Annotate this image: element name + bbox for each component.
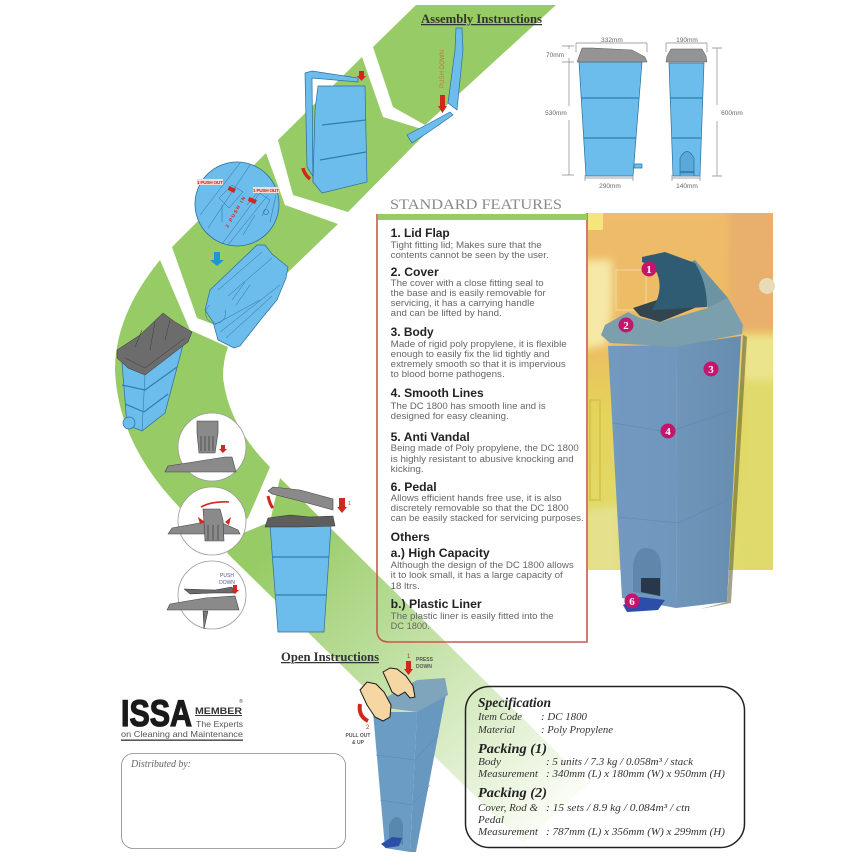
pull out label: 2	[366, 725, 370, 731]
feature: anti vandal: 5. Anti Vandal	[391, 432, 470, 444]
dimension lines and labels: 600mm	[721, 110, 743, 117]
pull out label	[346, 704, 370, 746]
feature: body: Made of rigid poly propylene, it is flexible	[391, 339, 567, 349]
bin cover	[601, 298, 743, 347]
red push labels: 1 PUSH OUT	[197, 180, 223, 186]
feature: high capacity: Although the design of the DC 1800 allows	[391, 560, 574, 570]
red push labels	[197, 179, 279, 229]
feature: smooth lines: 4. Smooth Lines	[391, 388, 484, 400]
logo: ISSA member: on Cleaning and Maintenance	[121, 729, 243, 739]
dimension drawing: side view	[577, 48, 647, 176]
callout 4	[660, 424, 676, 438]
feature: body: extremely smooth so that it is impervious	[391, 359, 566, 369]
press down label: 1	[407, 654, 411, 660]
feature: body: 3. Body	[391, 327, 434, 339]
feature: smooth lines	[391, 388, 546, 421]
feature: body: enough to easily fix the lid tightly and	[391, 349, 550, 359]
packing 2 rows: Measurement	[477, 827, 539, 838]
subheading: others: Others	[391, 532, 430, 544]
icon: red curved arrow	[303, 168, 310, 179]
spec rows: Item Code	[477, 712, 522, 723]
icon: blue down arrow	[210, 252, 224, 266]
callout 6: 6	[629, 596, 635, 608]
spec rows: Material	[477, 725, 515, 736]
feature: smooth lines: designed for easy cleaning.	[391, 411, 509, 421]
label: push down: PUSH DOWN	[440, 50, 446, 88]
panel: standard features	[377, 213, 587, 642]
packing 1 heading: Packing (1)	[478, 742, 547, 757]
logo: ISSA member: ISSA	[121, 693, 192, 734]
label: push down: PUSH	[220, 573, 234, 579]
red push labels: 1 PUSH OUT	[253, 188, 279, 194]
feature: cover: and can be lifted by hand.	[391, 308, 502, 318]
feature: plastic liner	[391, 599, 554, 631]
feature: anti vandal: Being made of Poly propylene, the DC 1800	[391, 443, 579, 453]
packing 1 rows: : 5 units / 7.3 kg / 0.058m³ / stack	[546, 757, 693, 768]
logo: ISSA member: ®	[239, 698, 243, 705]
label: push down: DOWN	[219, 580, 235, 586]
icon: arrow	[219, 445, 227, 453]
bin shadow	[700, 335, 747, 609]
dimension lines and labels: 332mm	[601, 37, 623, 44]
logo: ISSA member	[121, 693, 243, 741]
feature: cover	[391, 267, 546, 318]
feature: pedal: discretely removable so that the DC 1800	[391, 503, 569, 513]
photo: bin in washroom	[583, 205, 779, 612]
press down label: DOWN	[416, 664, 432, 670]
feature: body	[391, 327, 567, 379]
callout 3: 3	[708, 364, 714, 376]
logo: ISSA member: The Experts	[196, 719, 243, 729]
feature: plastic liner: The plastic liner is easily fitted into the	[391, 611, 554, 621]
heading: assembly instructions: Assembly Instructions	[421, 12, 542, 26]
callout 3	[704, 362, 718, 376]
green arrow band: assembly path	[115, 5, 588, 843]
assembly step: bin with liner	[117, 313, 192, 431]
detail circle: push down rod	[167, 561, 246, 629]
open instructions bin	[360, 668, 448, 852]
packing 2 rows: Cover, Rod &	[478, 803, 539, 814]
spec rows: : Poly Propylene	[541, 725, 613, 736]
bin pedal	[623, 597, 665, 612]
pull out label: & UP	[352, 740, 365, 746]
panel: specification	[466, 686, 744, 848]
icon: red down arrow	[337, 498, 347, 513]
callout 6	[624, 594, 640, 608]
dimension drawing: front view	[666, 49, 707, 176]
packing 2 rows: : 787mm (L) x 356mm (W) x 299mm (H)	[546, 827, 726, 838]
pull out label: PULL OUT	[346, 733, 370, 739]
heading: open instructions: Open Instructions	[281, 650, 379, 664]
feature: high capacity	[391, 548, 574, 591]
dimension lines and labels: 290mm	[599, 183, 621, 190]
assembly step: bin with lid	[265, 487, 351, 632]
feature: lid flap	[391, 228, 549, 260]
detail circle: rod above lid	[165, 413, 246, 481]
callout 2	[618, 318, 634, 332]
feature: lid flap: contents cannot be seen by the user.	[391, 250, 549, 260]
feature: high capacity: a.) High Capacity	[391, 548, 490, 560]
packing 1 rows: Body	[478, 757, 501, 768]
red push labels: 2 PUSH IN	[225, 195, 247, 229]
feature: cover: 2. Cover	[391, 267, 439, 279]
feature: lid flap: 1. Lid Flap	[391, 228, 450, 240]
panel: distributed by	[122, 754, 346, 848]
dimension lines and labels: 190mm	[676, 37, 698, 44]
feature: anti vandal	[391, 432, 579, 474]
callout 1	[642, 262, 656, 276]
feature: smooth lines: The DC 1800 has smooth line and is	[391, 401, 546, 411]
feature: pedal	[391, 482, 584, 523]
press down label	[404, 654, 434, 675]
packing 1 rows	[477, 757, 726, 780]
packing 1 rows: Measurement	[477, 769, 539, 780]
feature: cover: the base and is easily removable for	[391, 288, 546, 298]
packing 2 rows	[477, 803, 726, 838]
feature: body: to blood borne pathogens.	[391, 369, 505, 379]
packing 2 heading: Packing (2)	[478, 786, 547, 801]
feature: high capacity: 18 ltrs.	[391, 581, 420, 591]
panel: distributed by: Distributed by:	[130, 759, 191, 770]
spec rows: : DC 1800	[541, 712, 588, 723]
feature: pedal: Allows efficient hands free use, it is also	[391, 493, 562, 503]
callout 2: 2	[623, 320, 629, 332]
icon: hands	[360, 668, 415, 721]
spec heading: Specification	[478, 696, 551, 711]
packing 1 rows: : 340mm (L) x 180mm (W) x 950mm (H)	[546, 769, 726, 780]
icon: curved arrow	[268, 496, 273, 508]
heading: standard features: STANDARD FEATURES	[390, 197, 562, 213]
feature: pedal: 6. Pedal	[391, 482, 437, 494]
assembly step: stacked parts	[205, 245, 288, 348]
assembly step: bin with rod	[303, 71, 367, 193]
feature: plastic liner: b.) Plastic Liner	[391, 599, 482, 611]
feature: pedal: can be easily stacked for servicing purposes.	[391, 513, 584, 523]
feature: anti vandal: is highly resistant to abusive knocking and	[391, 454, 574, 464]
icon: red arrow top	[357, 71, 366, 81]
feature: plastic liner: DC 1800.	[391, 621, 430, 631]
bin body	[608, 336, 741, 612]
dimension lines and labels: 530mm	[545, 110, 567, 117]
feature: high capacity: it to look small, it has a large capacity of	[391, 570, 563, 580]
icon: arrow	[231, 585, 239, 594]
callout 4: 4	[665, 426, 671, 438]
dimension lines and labels: 70mm	[546, 52, 564, 59]
packing 2 rows: : 15 sets / 8.9 kg / 0.084m³ / ctn	[546, 803, 690, 814]
feature: lid flap: Tight fitting lid; Makes sure that the	[391, 240, 542, 250]
detail circle: fitting rod	[168, 487, 246, 555]
assembly step: rod and pedal	[407, 28, 463, 143]
spec rows	[477, 712, 613, 736]
bin lid flap	[633, 252, 728, 322]
dimension lines and labels: 140mm	[676, 183, 698, 190]
feature: anti vandal: kicking.	[391, 464, 424, 474]
press down label: PRESS	[416, 657, 434, 663]
feature: cover: servicing, it has a carrying handle	[391, 298, 535, 308]
logo: ISSA member: MEMBER	[195, 706, 242, 717]
feature: cover: The cover with a close fitting seal to	[391, 278, 544, 288]
packing 2 rows: Pedal	[477, 815, 504, 826]
detail circle: push out	[195, 162, 279, 246]
assembly step: bin with lid: 1	[348, 501, 351, 507]
icon: push down arrow	[438, 95, 447, 113]
callout 1: 1	[646, 264, 652, 276]
dimension lines and labels	[545, 37, 743, 190]
